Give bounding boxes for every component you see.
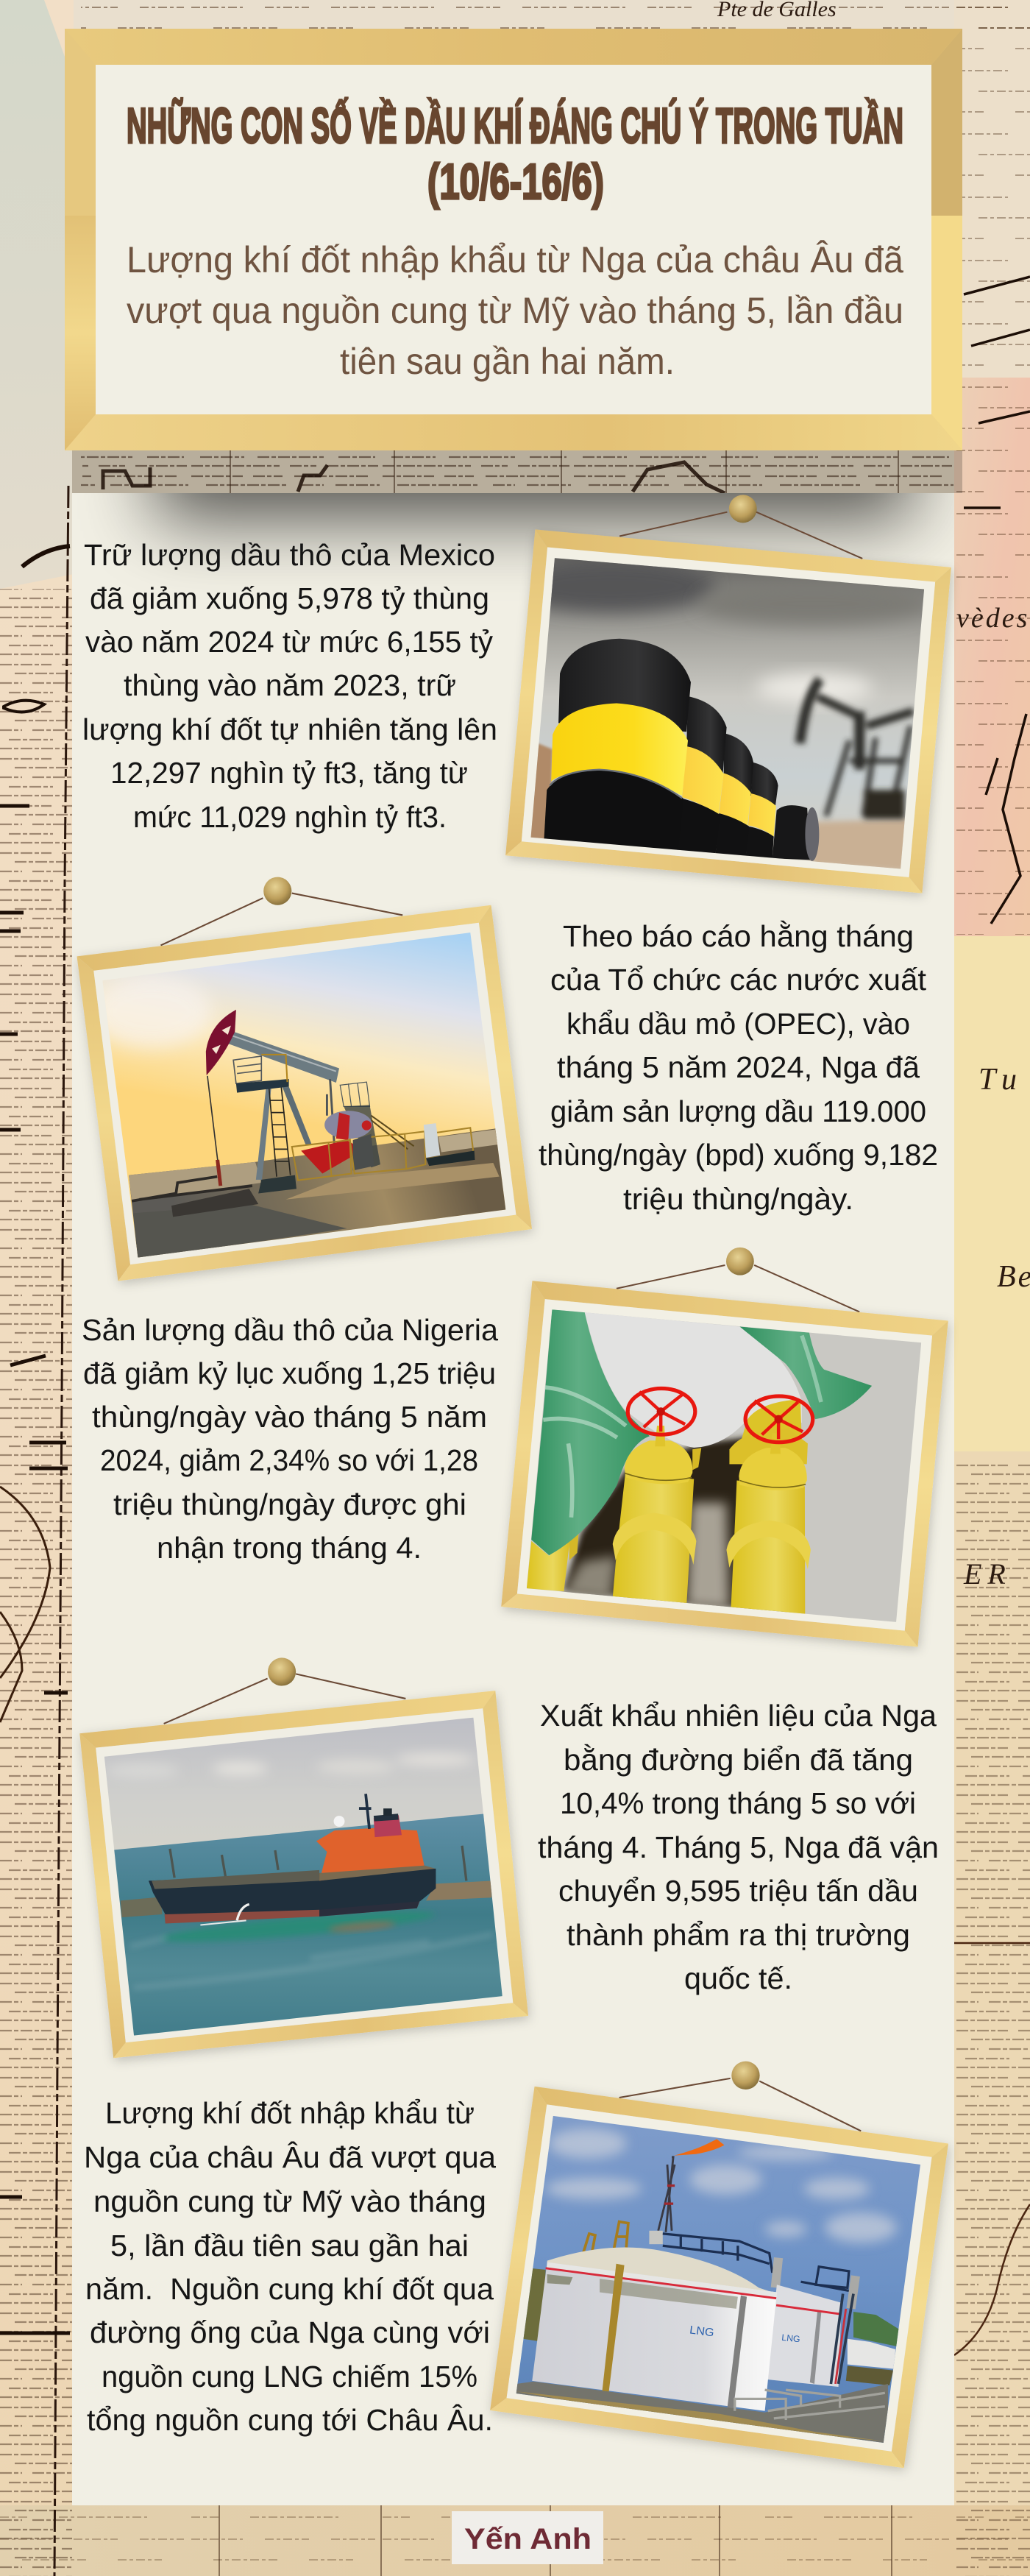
author badge — [452, 2511, 603, 2564]
panel: main paper sheet — [72, 493, 954, 2505]
wooden frame — [490, 2087, 948, 2468]
wooden frame — [79, 1691, 528, 2058]
text block: Mexico reserves: lượng khí đốt tự nhiên tăng lên — [82, 712, 497, 746]
text block: Mexico reserves: Trữ lượng dầu thô của Mexico — [84, 538, 495, 572]
wooden frame — [77, 905, 532, 1281]
icon: brass pin — [729, 495, 757, 523]
text block: Russian sea fuel exports: bằng đường biển đã tăng — [564, 1743, 913, 1777]
background: old map: Tu — [979, 1063, 1024, 1097]
photo: LNG storage tanks — [513, 2114, 927, 2447]
text block: Europe gas imports: Lượng khí đốt nhập khẩu từ — [105, 2096, 475, 2130]
subtitle — [127, 239, 903, 382]
text block: Russian sea fuel exports — [538, 1699, 939, 1995]
text block: Nigeria output: triệu thùng/ngày được ghi — [113, 1487, 466, 1521]
subtitle: vượt qua nguồn cung từ Mỹ vào tháng 5, lần đầu — [127, 290, 903, 331]
text block: Russian sea fuel exports: thành phẩm ra thị trường — [566, 1918, 910, 1952]
text block: OPEC Russia: triệu thùng/ngày. — [623, 1182, 853, 1216]
icon: brass pin — [726, 1248, 754, 1275]
text block: Mexico reserves: 12,297 nghìn tỷ ft3, tăng từ — [110, 756, 468, 790]
text block: Russian sea fuel exports: 10,4% trong tháng 5 so với — [560, 1786, 916, 1820]
text block: Europe gas imports: tổng nguồn cung tới Châu Âu. — [87, 2403, 493, 2437]
text block: Europe gas imports: Nga của châu Âu đã vượt qua — [84, 2140, 496, 2174]
hanging string — [164, 1674, 405, 1724]
header drop shadow on the sheet — [102, 493, 954, 576]
LNG lettering: LNG — [689, 2324, 715, 2339]
text block: Nigeria output: Sản lượng dầu thô của Nigeria — [82, 1313, 498, 1347]
wooden frame — [501, 1281, 948, 1647]
text block: Europe gas imports: nguồn cung LNG chiếm 15% — [102, 2360, 477, 2393]
hanging string — [161, 894, 402, 945]
text block: Mexico reserves: mức 11,029 nghìn tỷ ft3. — [133, 800, 447, 834]
background: old map: vèdes — [956, 603, 1029, 634]
text block: Nigeria output — [82, 1313, 498, 1565]
text block: Mexico reserves: thùng vào năm 2023, trữ — [124, 668, 456, 702]
text block: OPEC Russia: thùng/ngày (bpd) xuống 9,182 — [539, 1138, 938, 1172]
author badge: Yến Anh — [464, 2523, 592, 2555]
text block: Europe gas imports: năm. Nguồn cung khí đốt qua — [85, 2272, 494, 2306]
icon: brass pin — [731, 2062, 760, 2090]
subtitle: tiên sau gần hai năm. — [340, 341, 675, 382]
photo frame 1: oil barrels — [505, 495, 951, 894]
text block: Russian sea fuel exports: Xuất khẩu nhiên liệu của Nga — [540, 1699, 937, 1733]
text block: OPEC Russia: Theo báo cáo hằng tháng — [563, 919, 914, 953]
photo frame 3: yellow pipelines with Nigerian flag — [501, 1248, 948, 1647]
header text panel — [96, 65, 931, 414]
photo frame 5: LNG tanks — [490, 2062, 948, 2468]
photo: barrels and pumpjack — [506, 554, 931, 871]
text block: Nigeria output: thùng/ngày vào tháng 5 năm — [92, 1400, 487, 1434]
photo frame 4: oil tanker — [79, 1657, 528, 2058]
text block: Europe gas imports — [84, 2096, 496, 2437]
text block: OPEC Russia: của Tổ chức các nước xuất — [550, 963, 927, 997]
text block: Nigeria output: nhận trong tháng 4. — [157, 1531, 422, 1565]
hanging string — [617, 1265, 859, 1312]
text block: OPEC Russia — [539, 919, 938, 1216]
text block: OPEC Russia: tháng 5 năm 2024, Nga đã — [557, 1050, 920, 1084]
background: old map: ER — [963, 1557, 1012, 1590]
photo: pumpjack — [90, 930, 511, 1262]
text block: Russian sea fuel exports: quốc tế. — [684, 1961, 792, 1995]
LNG lettering — [690, 2326, 800, 2342]
wooden frame — [505, 529, 951, 894]
photo: tanker at sea — [96, 1714, 511, 2038]
hanging string — [619, 2078, 861, 2131]
LNG lettering: LNG — [781, 2332, 800, 2344]
title — [127, 97, 903, 210]
text block: OPEC Russia: khẩu dầu mỏ (OPEC), vào — [566, 1007, 910, 1041]
text block: Mexico reserves: vào năm 2024 từ mức 6,155 tỷ — [85, 625, 493, 659]
text block: Europe gas imports: đường ống của Nga cùng với — [90, 2315, 490, 2349]
hanging string — [619, 512, 862, 559]
icon: brass pin — [263, 877, 291, 905]
text block: Mexico reserves: đã giảm xuống 5,978 tỷ thùng — [90, 581, 489, 615]
text block: Russian sea fuel exports: tháng 4. Tháng 5, Nga đã vận — [538, 1830, 939, 1864]
title: (10/6-16/6) — [427, 154, 604, 210]
text block: Europe gas imports: 5, lần đầu tiên sau gần hai — [110, 2229, 469, 2262]
photo: pipes and valves — [522, 1307, 925, 1627]
text block: Mexico reserves — [82, 538, 497, 834]
text block: Nigeria output: đã giảm kỷ lục xuống 1,25 triệu — [83, 1356, 496, 1390]
panel: header frame — [65, 29, 962, 450]
subtitle: Lượng khí đốt nhập khẩu từ Nga của châu Âu đã — [127, 239, 903, 280]
light shadow on map strip — [72, 450, 962, 493]
text block: OPEC Russia: giảm sản lượng dầu 119.000 — [550, 1094, 926, 1128]
text block: Russian sea fuel exports: chuyển 9,595 triệu tấn dầu — [558, 1874, 918, 1908]
photo frame 2: pumpjack at sunset — [77, 877, 532, 1281]
text block: Europe gas imports: nguồn cung từ Mỹ vào tháng — [93, 2184, 486, 2218]
text block: Nigeria output: 2024, giảm 2,34% so với 1,28 — [100, 1443, 478, 1477]
icon: brass pin — [268, 1657, 296, 1686]
